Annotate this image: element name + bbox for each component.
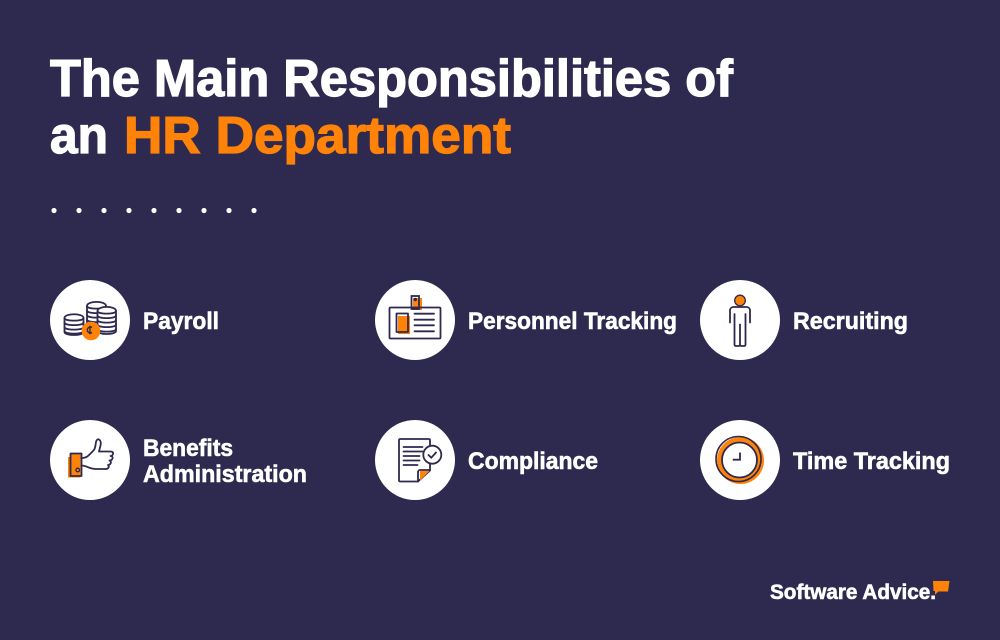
title: HR Department xyxy=(124,107,511,165)
icon: clock xyxy=(700,420,780,500)
dotted separator xyxy=(51,208,257,213)
title: an xyxy=(50,107,108,165)
label: recruiting: Recruiting xyxy=(793,308,908,335)
title xyxy=(50,50,734,165)
label: compliance: Compliance xyxy=(468,448,598,475)
item: payroll xyxy=(50,280,219,360)
label: benefits administration: Benefits xyxy=(143,435,233,462)
icon: id badge xyxy=(375,280,455,360)
title: The Main Responsibilities of xyxy=(50,50,734,108)
icon: coin stacks xyxy=(50,280,130,360)
label: payroll: Payroll xyxy=(143,308,219,335)
label: personnel tracking: Personnel Tracking xyxy=(468,308,677,335)
label: time tracking: Time Tracking xyxy=(793,448,950,475)
icon: document with check xyxy=(375,420,455,500)
icon: speech bubble xyxy=(933,581,950,594)
label: benefits administration: Administration xyxy=(143,461,307,488)
icon: person xyxy=(700,280,780,360)
label: benefits administration xyxy=(143,435,307,488)
item: personnel tracking xyxy=(375,280,677,360)
item: time tracking xyxy=(700,420,950,500)
item: recruiting xyxy=(700,280,908,360)
item: compliance xyxy=(375,420,598,500)
logo: software advice: Software Advice. xyxy=(770,581,936,604)
item: benefits administration xyxy=(50,420,307,500)
icon: thumbs up xyxy=(50,420,130,500)
